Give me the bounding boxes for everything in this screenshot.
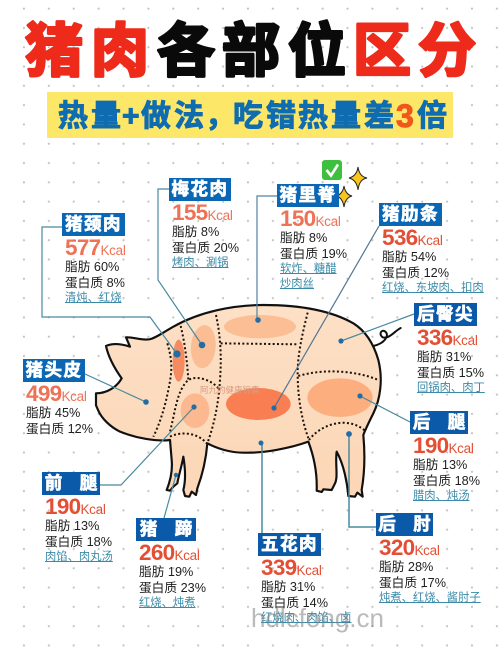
panel: 猪颈肉: 清炖、红烧 (65, 292, 122, 304)
panel: 猪蹄: 红烧、炖煮 (139, 597, 196, 609)
panel: 猪颈肉: 577Kcal (65, 235, 126, 260)
panel: 猪里脊: 猪里脊 (280, 182, 336, 207)
title (25, 4, 476, 88)
panel: 猪蹄: 蛋白质 23% (139, 580, 206, 594)
panel: 猪里脊: 蛋白质 19% (280, 246, 347, 260)
panel: 后腿 (410, 409, 480, 502)
panel: 猪颈肉: 蛋白质 8% (65, 276, 125, 290)
panel: 猪头皮: 脂肪 45% (26, 406, 80, 420)
panel: 猪头皮: 猪头皮 (26, 357, 82, 382)
panel: 五花肉 (258, 531, 352, 624)
subtitle: 热量 (58, 100, 121, 133)
subtitle: 倍 (417, 100, 447, 133)
panel: 后臀尖: 后臀尖 (417, 301, 474, 326)
panel: 前腿: 190Kcal (45, 494, 106, 519)
panel: 前腿 (42, 470, 113, 563)
subtitle: + (122, 100, 140, 133)
icon: sparkles (336, 167, 367, 207)
panel: 猪头皮 (23, 357, 93, 436)
panel: 后腿: 脂肪 13% (413, 458, 467, 472)
panel: 梅花肉 (169, 176, 239, 269)
panel: 五花肉: 339Kcal (261, 555, 322, 580)
panel: 后腿: 蛋白质 18% (413, 474, 480, 488)
panel: 后臀尖: 336Kcal (417, 325, 478, 350)
title: 猪肉 (25, 4, 149, 88)
pig outline (96, 305, 381, 497)
panel: 后肘: 320Kcal (379, 535, 440, 560)
panel: 猪蹄: 脂肪 19% (139, 565, 193, 579)
panel: 前腿: 脂肪 13% (45, 519, 99, 533)
panel: 猪里脊: 脂肪 8% (280, 231, 327, 245)
panel: 猪蹄: 260Kcal (139, 540, 200, 565)
small watermark: 阿九的健康锦囊 (200, 385, 260, 395)
leader lines (42, 189, 414, 533)
panel: 猪肋条: 536Kcal (382, 225, 443, 250)
title: 各部位 (157, 4, 346, 88)
panel: 后肘: 后 肘 (378, 511, 431, 536)
panel: 后臀尖 (414, 301, 485, 394)
panel: 猪颈肉: 脂肪 60% (65, 260, 119, 274)
panel: 猪肋条: 红烧、东坡肉、扣肉 (382, 282, 484, 294)
panel: 后肘 (376, 511, 481, 604)
panel: 前腿: 前 腿 (45, 470, 97, 495)
panel: 后腿: 后 腿 (413, 409, 465, 434)
icon: green check (322, 160, 342, 180)
panel: 五花肉: 五花肉 (261, 531, 318, 556)
panel: 猪蹄 (136, 516, 206, 609)
panel: 梅花肉: 烤肉、涮锅 (172, 257, 228, 269)
meat zones (173, 315, 373, 428)
panel: 猪头皮: 499Kcal (26, 381, 87, 406)
panel: 后腿: 190Kcal (413, 433, 474, 458)
panel: 猪颈肉: 猪颈肉 (65, 211, 122, 236)
panel: 梅花肉: 155Kcal (172, 200, 233, 225)
panel: 猪头皮: 蛋白质 12% (26, 422, 93, 436)
panel: 猪蹄: 猪 蹄 (140, 516, 192, 541)
subtitle (58, 98, 447, 134)
panel: 梅花肉: 脂肪 8% (172, 225, 219, 239)
panel: 前腿: 蛋白质 18% (45, 534, 112, 548)
panel: 后臀尖: 蛋白质 15% (417, 366, 484, 380)
pig tail (373, 328, 401, 346)
title: 区分 (353, 4, 476, 88)
site watermark: hdlcfong.cn (251, 603, 384, 633)
panel: 后肘: 脂肪 28% (379, 560, 433, 574)
panel: 猪肋条: 蛋白质 12% (382, 266, 449, 280)
panel: 猪肋条: 猪肋条 (382, 201, 439, 226)
panel: 猪里脊: 炒肉丝 (280, 278, 314, 290)
panel: 猪里脊 (277, 182, 347, 290)
panel: 五花肉: 脂肪 31% (261, 580, 315, 594)
panel: 猪肋条 (379, 201, 484, 294)
subtitle: 做法， (141, 100, 235, 133)
leader dots (143, 317, 363, 477)
subtitle band (47, 92, 453, 138)
panel: 五花肉: 红烧肉、肉馅、卤 (261, 612, 351, 624)
panel: 猪肋条: 脂肪 54% (382, 250, 436, 264)
panel: 后臀尖: 脂肪 31% (417, 350, 471, 364)
dotted cut lines (153, 313, 378, 443)
panel: 后臀尖: 回锅肉、肉丁 (417, 382, 485, 394)
subtitle: 吃错热量差 (233, 100, 394, 133)
panel: 后肘: 炖煮、红烧、酱肘子 (379, 592, 481, 604)
panel: 猪里脊: 150Kcal (280, 206, 341, 231)
subtitle: 3 (396, 98, 414, 134)
pig body (96, 305, 401, 497)
panel: 五花肉: 蛋白质 14% (261, 596, 328, 610)
panel: 前腿: 肉馅、肉丸汤 (45, 551, 113, 563)
panel: 后肘: 蛋白质 17% (379, 576, 446, 590)
panel: 梅花肉: 梅花肉 (172, 176, 228, 201)
panel: 后腿: 腊肉、炖汤 (413, 490, 470, 502)
panel: 猪颈肉 (62, 211, 126, 304)
panel: 猪里脊: 软炸、糖醋 (280, 263, 336, 275)
panel: 梅花肉: 蛋白质 20% (172, 240, 239, 254)
